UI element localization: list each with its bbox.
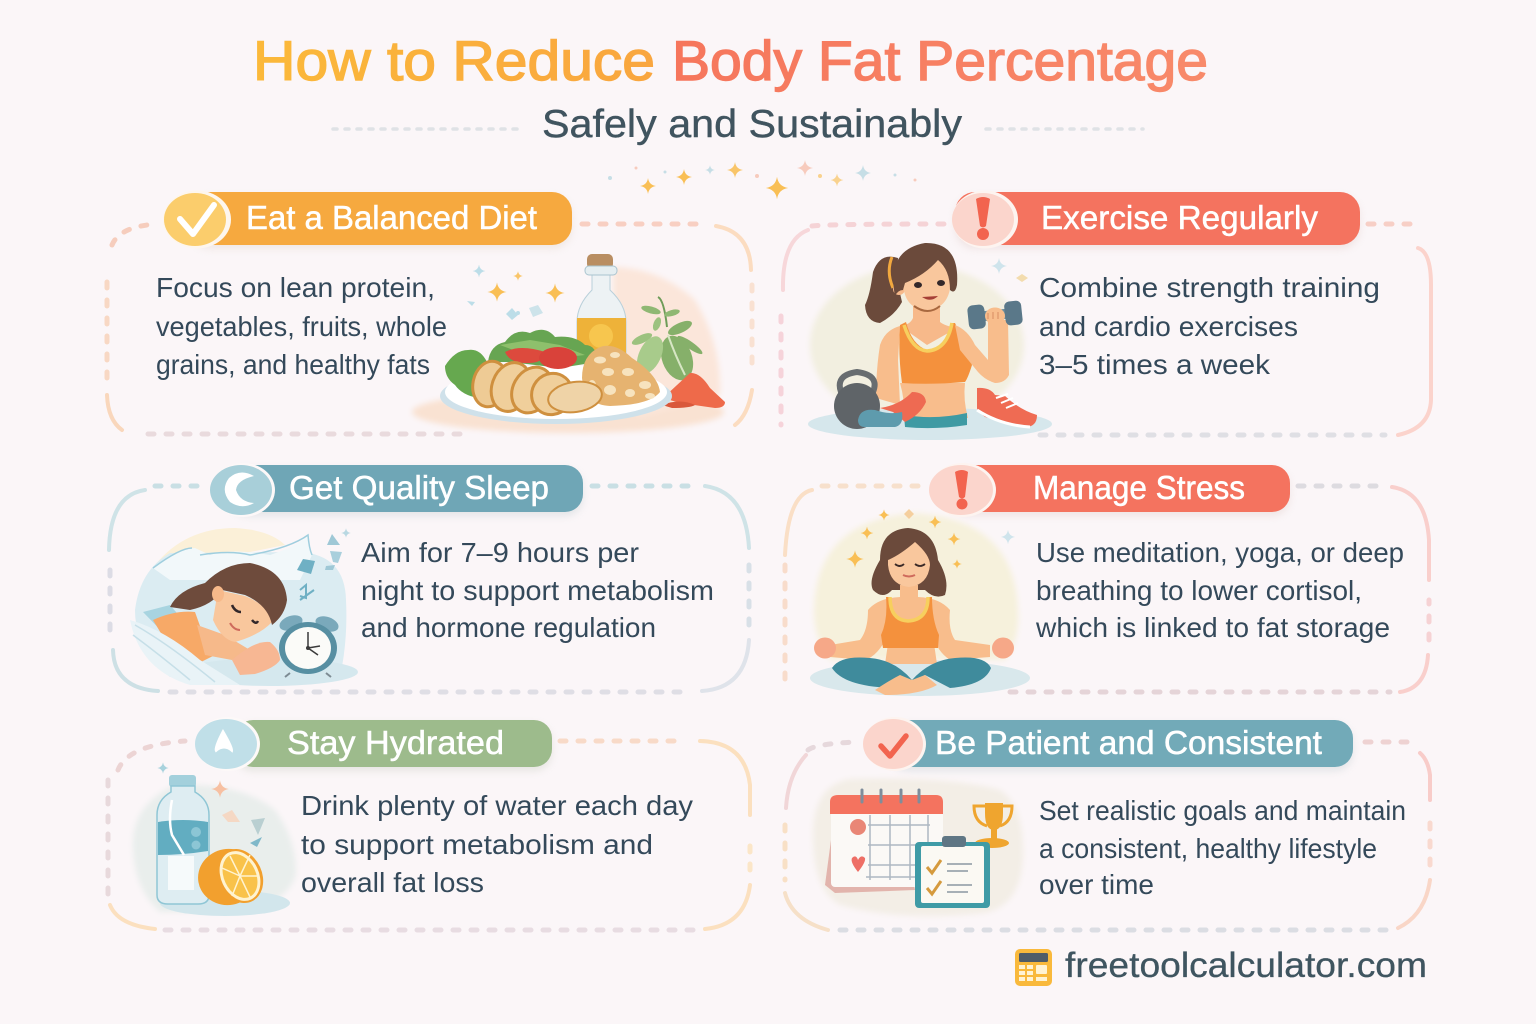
body text: Set realistic goals and maintain <box>1039 795 1406 826</box>
body text <box>1039 272 1380 380</box>
body text <box>1039 795 1406 900</box>
dashed frame <box>108 741 750 930</box>
body text: Aim for 7–9 hours per <box>361 537 639 568</box>
panel: Manage Stress <box>785 463 1429 696</box>
body text: a consistent, healthy lifestyle <box>1039 833 1377 864</box>
body text: night to support metabolism <box>361 575 714 606</box>
heading pill: Eat a Balanced Diet <box>246 199 537 236</box>
subtitle: Safely and Sustainably <box>542 103 963 146</box>
panel: Eat a Balanced Diet <box>107 190 752 434</box>
dashed frame <box>109 486 749 692</box>
body text: Combine strength training <box>1039 272 1380 303</box>
footer: website <box>1015 946 1427 986</box>
illustration: water bottle and orange <box>133 762 296 916</box>
heading pill: Manage Stress <box>1033 469 1245 506</box>
icon: exclamation mark <box>976 197 990 240</box>
body text: Focus on lean protein, <box>156 272 435 303</box>
panel: Get Quality Sleep <box>109 463 749 692</box>
dashed frame <box>781 224 1431 435</box>
heading pill: Be Patient and Consistent <box>935 724 1322 761</box>
panel: Stay Hydrated <box>108 717 750 930</box>
body text <box>1035 537 1404 643</box>
title: How to Reduce <box>253 29 655 92</box>
heading pill <box>863 717 1353 771</box>
dashed frame <box>785 742 1430 930</box>
body text <box>301 790 693 898</box>
body text: breathing to lower cortisol, <box>1036 575 1362 606</box>
decorative sparkles <box>608 160 916 199</box>
icon: check mark <box>881 736 906 756</box>
illustration: woman with dumbbell <box>808 243 1052 440</box>
body text: vegetables, fruits, whole <box>156 311 447 342</box>
dashed frame <box>107 224 752 434</box>
heading pill <box>210 463 583 517</box>
icon: calculator <box>1015 949 1052 986</box>
panel: Exercise Regularly <box>781 190 1431 440</box>
body text <box>156 272 447 380</box>
body text: grains, and healthy fats <box>156 349 430 380</box>
illustration: healthy plate <box>412 254 725 433</box>
heading pill <box>163 190 572 249</box>
heading pill <box>929 463 1290 517</box>
illustration: sleeping woman with clock <box>130 528 358 686</box>
icon: exclamation mark <box>955 470 968 510</box>
body text: Drink plenty of water each day <box>301 790 693 821</box>
body text: Use meditation, yoga, or deep <box>1036 537 1404 568</box>
illustration: calendar, trophy and checklist <box>813 778 1023 916</box>
body text <box>361 537 714 643</box>
icon: check mark <box>180 205 214 234</box>
body text: and hormone regulation <box>361 612 656 643</box>
website url: freetoolcalculator.com <box>1065 946 1427 985</box>
dashed frame <box>785 486 1429 692</box>
body text: over time <box>1039 869 1154 900</box>
heading pill <box>195 717 552 771</box>
body text: which is linked to fat storage <box>1035 612 1390 643</box>
heading pill: Get Quality Sleep <box>289 469 549 506</box>
icon: moon <box>225 472 254 506</box>
illustration: meditating woman <box>810 509 1030 696</box>
panel: Be Patient and Consistent <box>785 717 1430 930</box>
body text: to support metabolism and <box>301 829 653 860</box>
body text: and cardio exercises <box>1039 311 1298 342</box>
icon: water drop <box>216 731 232 751</box>
body text: overall fat loss <box>301 867 484 898</box>
heading pill <box>952 190 1360 249</box>
heading pill: Stay Hydrated <box>287 724 504 761</box>
heading pill: Exercise Regularly <box>1041 199 1318 236</box>
title: Body Fat Percentage <box>672 29 1208 92</box>
title <box>253 29 1208 92</box>
body text: 3–5 times a week <box>1039 349 1271 380</box>
